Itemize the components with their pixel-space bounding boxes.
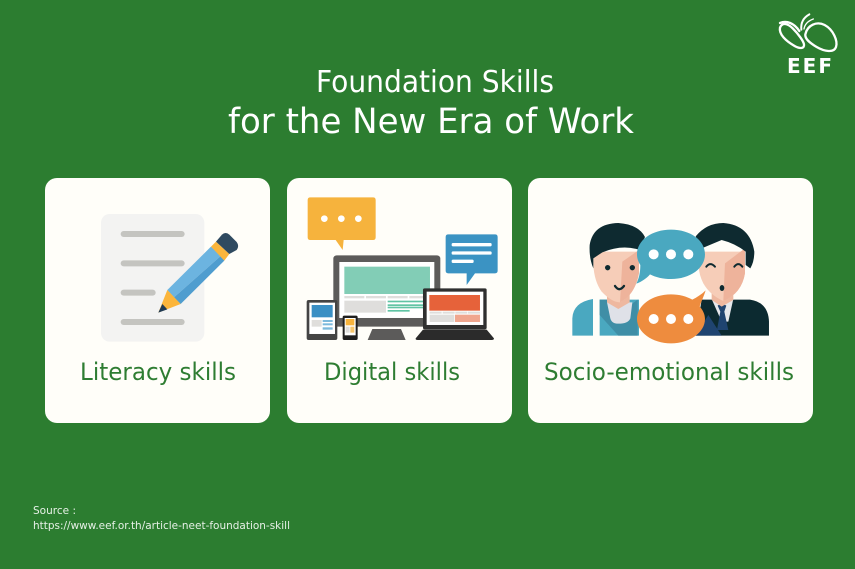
title (228, 65, 635, 142)
icon: devices and speech bubbles (307, 197, 498, 340)
right person (696, 223, 769, 336)
source note: Source : (33, 504, 76, 517)
title: for the New Era of Work (228, 102, 635, 142)
source note (33, 504, 290, 532)
panel: socio-emotional skills (528, 178, 813, 423)
source note: https://www.eef.or.th/article-neet-foundation-skill (33, 519, 290, 532)
teal speech bubble (636, 230, 705, 284)
label: literacy skills: Literacy skills (80, 358, 236, 386)
label: socio-emotional skills: Socio-emotional skills (544, 358, 794, 386)
logo: EEF (780, 14, 836, 78)
icon: two people talking (572, 223, 769, 343)
icon: document and pencil (101, 214, 238, 342)
logo: EEF: EEF (787, 54, 832, 78)
panel: literacy skills (45, 178, 270, 423)
label: digital skills: Digital skills (324, 358, 460, 386)
left person (572, 223, 645, 336)
panel: digital skills (287, 178, 512, 423)
orange speech bubble (637, 290, 706, 343)
title: Foundation Skills (316, 65, 554, 100)
